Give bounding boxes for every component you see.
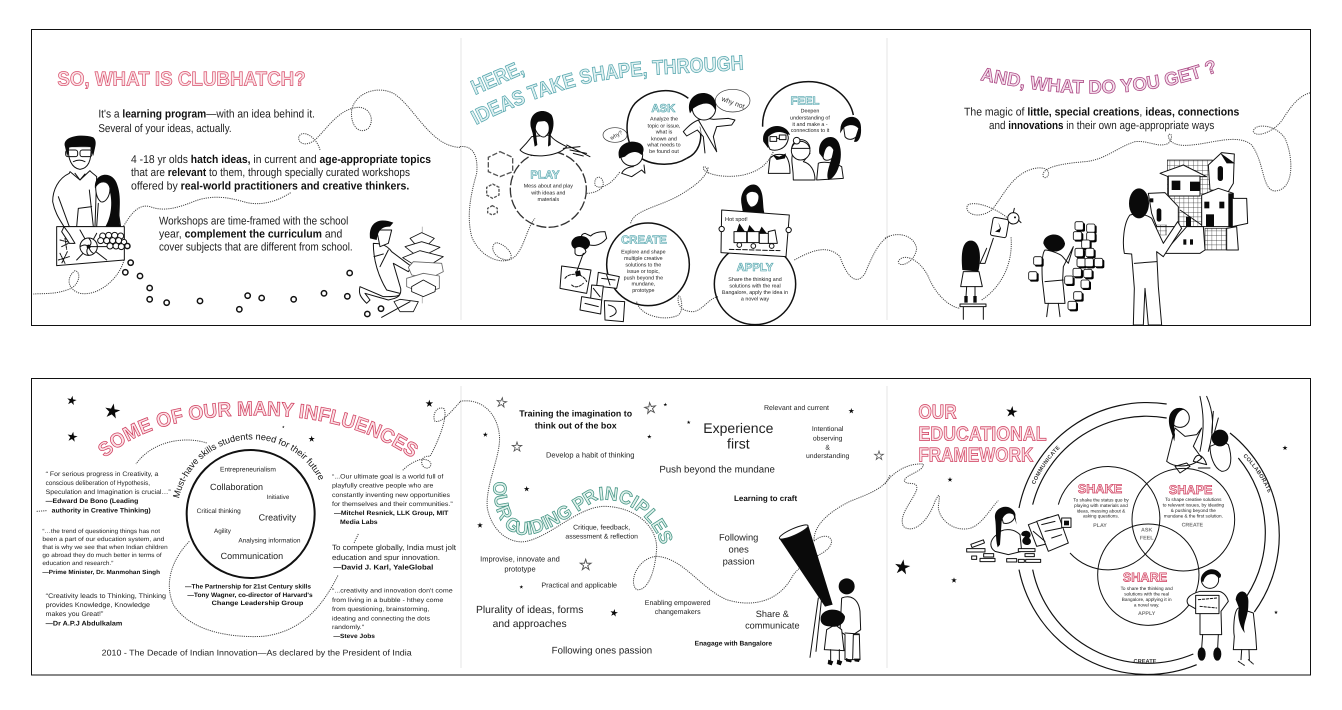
principles word cloud: Push beyond the mundane: [659, 464, 775, 475]
venn diagram: SHARE: [1123, 571, 1167, 585]
apply bubble: APPLY: [737, 261, 773, 274]
illustration: child drawing: [560, 232, 625, 322]
quote: Steve Jobs: [332, 587, 453, 639]
venn diagram: To share the thinking and: [1121, 586, 1173, 591]
panel: ideas take shape: [460, 55, 890, 325]
title: HERE,: [470, 62, 525, 95]
principles word cloud: passion: [723, 556, 755, 566]
text block: the magic: The magic of little, special creations, ideas, connections: [964, 106, 1239, 118]
title: SO, WHAT IS CLUBHATCH?: [57, 67, 306, 90]
venn diagram: To shake the status quo by: [1073, 497, 1129, 502]
illustration: thinking boy: [603, 128, 645, 177]
venn diagram: Bangalore, applying it in: [1122, 597, 1172, 602]
ask bubble: ASK: [651, 102, 675, 115]
create bubble: [607, 223, 689, 306]
title: FRAMEWORK: [918, 443, 1033, 466]
venn diagram: mundane & the first solution.: [1164, 513, 1223, 519]
footer note: 2010 - The Decade of Indian Innovation—As declared by the President of India: [102, 648, 412, 658]
principles word cloud: Experience: [703, 420, 773, 436]
feel bubble: it and make a -: [792, 122, 828, 127]
quote: Edward De Bono: —Edward De Bono (Leading: [46, 497, 138, 505]
text block: learning program: [98, 108, 315, 135]
quote: Mitchel Resnick: playfully creative people who are: [332, 482, 433, 489]
panel: so, what is ClubHatch: [33, 67, 460, 317]
principles word cloud: &: [825, 443, 830, 451]
title: SOME OF OUR MANY INFLUENCES: [98, 401, 418, 457]
principles word cloud: prototype: [504, 565, 536, 573]
stars: [66, 395, 433, 442]
framework rings: CREATE: [1134, 658, 1156, 664]
principles word cloud: Plurality of ideas, forms: [476, 604, 583, 615]
create bubble: multiple creative: [624, 256, 663, 261]
principles word cloud: [476, 404, 849, 656]
principles word cloud: Training the imagination to: [519, 408, 632, 418]
quote: Edward De Bono: [46, 470, 171, 514]
create bubble: prototype: [632, 288, 654, 293]
principles word cloud: Improvise, innovate and: [480, 555, 560, 563]
principles word cloud: Critique, feedback,: [573, 523, 630, 531]
quote: Manmohan Singh: that is why we see that when Indian children: [42, 544, 168, 550]
principles word cloud: think out of the box: [535, 421, 617, 431]
text block: learning program: It's a learning program—with an idea behind it.: [98, 108, 315, 120]
title: EDUCATIONAL: [918, 423, 1047, 445]
quote: Mitchel Resnick: “...Our ultimate goal is a world full of: [332, 473, 444, 480]
chart: skills circle: Collaboration: [210, 482, 263, 492]
quote: Manmohan Singh: [42, 528, 168, 575]
illustration: girl with tree and child: [1167, 396, 1231, 473]
top frame: [32, 30, 1310, 326]
quote: Abdul Kalam: makes you Great!”: [46, 610, 103, 618]
text block: hatch ideas: that are relevant to them, through specially curated workshops: [131, 166, 410, 179]
venn diagram: playing with materials and: [1074, 503, 1128, 508]
principles word cloud: understanding: [806, 452, 849, 460]
quote: Steve Jobs: ideating and connecting the dots: [332, 615, 430, 622]
venn diagram: To shape creative solutions: [1165, 497, 1221, 502]
bottom frame: [32, 378, 1310, 675]
principles word cloud: Following: [719, 532, 758, 543]
create bubble: Explore and shape: [621, 249, 666, 255]
create bubble: solutions to the: [625, 262, 661, 268]
illustration: parent and child with tray: [53, 136, 127, 266]
quote: Edward De Bono: “ For serious progress in Creativity, a: [46, 470, 158, 478]
apply bubble: [714, 243, 796, 325]
quote: David Karl: —David J. Karl, YaleGlobal: [333, 563, 433, 571]
text block: workshops: [159, 214, 353, 253]
illustration: thinking boy: why?: [609, 129, 624, 141]
quote: Edward De Bono: conscious deliberation of Hypothesis,: [46, 479, 150, 487]
title: IDEAS TAKE SHAPE, THROUGH: [470, 55, 744, 125]
principles word cloud: Practical and applicable: [541, 581, 617, 589]
feel bubble: FEEL: [791, 94, 819, 107]
quote: Mitchel Resnick: [332, 473, 453, 526]
principles word cloud: observing: [813, 434, 842, 442]
venn diagram: a novel way.: [1134, 602, 1159, 607]
text block: workshops: Workshops are time-framed with the school: [159, 214, 348, 227]
illustration: house collage: [1148, 153, 1248, 253]
venn diagram: CREATE: [1182, 522, 1203, 528]
principles word cloud: Enabling empowered: [645, 599, 711, 607]
illustration: boy with books: [1187, 569, 1228, 661]
venn diagram: PLAY: [1093, 523, 1107, 528]
play bubble: materials: [538, 197, 559, 202]
venn diagram: APPLY: [1138, 611, 1155, 616]
apply bubble: Share the thinking and: [728, 277, 782, 282]
quote: Edward De Bono: Speculation and Imagination is crucial…”: [46, 488, 171, 496]
venn diagram: SHAKE: [1078, 482, 1122, 496]
venn diagram: solutions with the real: [1124, 591, 1169, 597]
venn diagram: SHAPE: [1169, 483, 1212, 497]
quote: Abdul Kalam: provides Knowledge, Knowledge: [46, 601, 150, 609]
panel: educational framework: [884, 396, 1288, 674]
text block: workshops: cover subjects that are different from school.: [159, 240, 353, 253]
chart: skills circle: Agility: [214, 528, 231, 535]
attribution: skills sources: —The Partnership for 21st Century skills: [185, 583, 311, 590]
create bubble: mundane,: [631, 281, 655, 287]
ask bubble: be found out: [649, 149, 679, 154]
panel: guiding principles: [460, 396, 904, 666]
quote: Manmohan Singh: education and research.”: [42, 560, 113, 566]
principles word cloud: Develop a habit of thinking: [546, 451, 634, 459]
apply bubble: Bangalore, apply the idea in: [722, 290, 788, 295]
principles word cloud: Following ones passion: [552, 645, 652, 656]
principles word cloud: Learning to craft: [734, 494, 797, 503]
illustration: girl playing: [520, 111, 590, 157]
illustration: telescope and children: [778, 523, 861, 665]
stars: [477, 397, 883, 617]
chart: skills circle: Analysing information: [238, 537, 300, 544]
feel bubble: understanding of: [790, 115, 830, 121]
play bubble: [487, 151, 586, 227]
chart: skills circle: Communication: [221, 551, 283, 561]
play bubble: Mess about and play: [524, 183, 573, 189]
panel: influences: [36, 396, 460, 658]
feel bubble: connections to it: [791, 128, 829, 133]
quote: Edward De Bono: authority in Creative Thinking): [52, 507, 151, 514]
illustration: boy with hexagon stack: [359, 220, 443, 317]
principles word cloud: Enagage with Bangalore: [695, 640, 772, 647]
illustration: group of children: [763, 117, 861, 180]
attribution: skills sources: [185, 583, 313, 607]
venn diagram: [1058, 467, 1235, 625]
venn diagram: FEEL: [1140, 535, 1154, 541]
illustration: girl with poster: Hot spot!: [725, 216, 748, 222]
venn diagram: to relevant issues, by ideating: [1163, 502, 1224, 508]
text block: hatch ideas: [131, 153, 431, 192]
play bubble: PLAY: [530, 168, 560, 181]
chart: skills circle: [173, 434, 323, 579]
chart: skills circle: Initiative: [267, 493, 289, 500]
illustration: girl with mind map: [967, 507, 1071, 562]
quote: David Karl: education and spur innovation.: [332, 553, 440, 562]
quote: Steve Jobs: from questioning, brainstorming,: [332, 605, 429, 612]
ask bubble: what needs to: [647, 142, 681, 148]
quote: Steve Jobs: —Steve Jobs: [333, 632, 375, 639]
quote: Abdul Kalam: —Dr A.P.J Abdulkalam: [46, 620, 122, 627]
illustration: asking girl: why not: [720, 95, 746, 110]
principles word cloud: Share &: [756, 609, 789, 619]
stars: [894, 405, 1288, 614]
venn diagram: ASK: [1141, 527, 1152, 533]
quote: Manmohan Singh: go abroad they do much better in terms of: [42, 552, 162, 558]
quote: Mitchel Resnick: for themselves and their communities.”: [332, 501, 453, 508]
venn diagram: & pushing beyond the: [1171, 508, 1216, 513]
attribution: skills sources: —Tony Wagner, co-director of Harvard's: [187, 592, 313, 599]
ask bubble: known and: [651, 136, 677, 142]
principles word cloud: first: [727, 436, 750, 452]
quote: Steve Jobs: randomly.”: [332, 623, 364, 630]
illustration: girl with poster: [719, 185, 791, 257]
play bubble: with ideas and: [531, 190, 565, 196]
ask bubble: Analyze the: [650, 116, 678, 122]
chart: skills circle: Creativity: [259, 513, 296, 523]
framework rings: [1018, 402, 1280, 674]
attribution: skills sources: Change Leadership Group: [212, 600, 303, 607]
create bubble: push beyond the: [624, 275, 663, 281]
quote: Abdul Kalam: [46, 592, 166, 627]
illustration: asking girl: [683, 89, 750, 153]
text block: learning program: Several of your ideas, actually.: [98, 122, 232, 135]
ask bubble: what is: [655, 129, 672, 135]
venn diagram: ideas, messing about &: [1077, 508, 1125, 513]
text block: the magic: [964, 106, 1239, 132]
create bubble: CREATE: [621, 234, 667, 246]
principles word cloud: changemakers: [655, 608, 701, 616]
text block: hatch ideas: offered by real-world practitioners and creative thinkers.: [131, 179, 409, 192]
illustration: adult from behind: [1123, 188, 1182, 325]
principles word cloud: communicate: [745, 620, 800, 631]
apply bubble: a novel way: [741, 296, 769, 302]
chart: skills circle: Critical thinking: [197, 507, 241, 515]
title: [918, 401, 1047, 466]
quote: David Karl: [332, 543, 456, 571]
quote: David Karl: To compete globally, India must jolt: [332, 543, 456, 552]
principles word cloud: Intentional: [812, 425, 843, 433]
quote: Abdul Kalam: “Creativity leads to Thinking, Thinking: [46, 592, 166, 600]
ask bubble: topic or issue,: [648, 123, 680, 129]
quote: Steve Jobs: from living in a bubble - hthey come: [332, 596, 443, 603]
text block: workshops: year, complement the curriculum and: [159, 227, 342, 240]
quote: Mitchel Resnick: constantly inventing new opportunities: [332, 492, 450, 499]
chart: skills circle: Must-have skills students need for their future: [173, 434, 323, 498]
chart: skills circle: Entrepreneurialism: [220, 466, 276, 473]
illustration: girl from behind: [1233, 591, 1257, 665]
quote: Steve Jobs: “...creativity and innovation don't come: [332, 587, 453, 594]
principles word cloud: Relevant and current: [764, 404, 829, 412]
panel: what do you get: [884, 60, 1310, 325]
seeds: [123, 243, 384, 317]
principles word cloud: ones: [729, 544, 749, 555]
framework rings: COLLABORATE: [1244, 454, 1272, 493]
principles word cloud: and approaches: [493, 618, 567, 629]
quote: Manmohan Singh: “…the trend of questioning things has not: [42, 528, 160, 534]
ask bubble: [627, 91, 701, 164]
text block: the magic: and innovations in their own age-appropriate ways: [989, 119, 1214, 132]
text block: hatch ideas: 4 -18 yr olds hatch ideas, in current and age-appropriate topics: [131, 153, 431, 166]
quote: Manmohan Singh: —Prime Minister, Dr. Manmohan Singh: [42, 569, 160, 575]
feel bubble: [763, 82, 853, 133]
quote: Manmohan Singh: been a part of our education system, and: [42, 536, 164, 542]
quote: Mitchel Resnick: Media Labs: [340, 519, 378, 526]
principles word cloud: assessment & reflection: [565, 532, 638, 540]
title: OUR GUIDING PRINCIPLES: [492, 482, 672, 544]
title: OUR: [918, 401, 957, 423]
feel bubble: Deepen: [801, 108, 819, 114]
create bubble: issue or topic,: [627, 269, 660, 274]
quote: Mitchel Resnick: —Mitchel Resnick, LLK Group, MIT: [334, 510, 448, 517]
illustration: boy with cubes: [1029, 222, 1104, 317]
illustration: girl on stool: [960, 208, 1021, 319]
venn diagram: asking questions.: [1083, 513, 1119, 519]
framework rings: COMMUNICATE: [1032, 446, 1060, 484]
apply bubble: solutions with the real: [729, 283, 781, 289]
title: AND, WHAT DO YOU GET ?: [980, 60, 1215, 94]
